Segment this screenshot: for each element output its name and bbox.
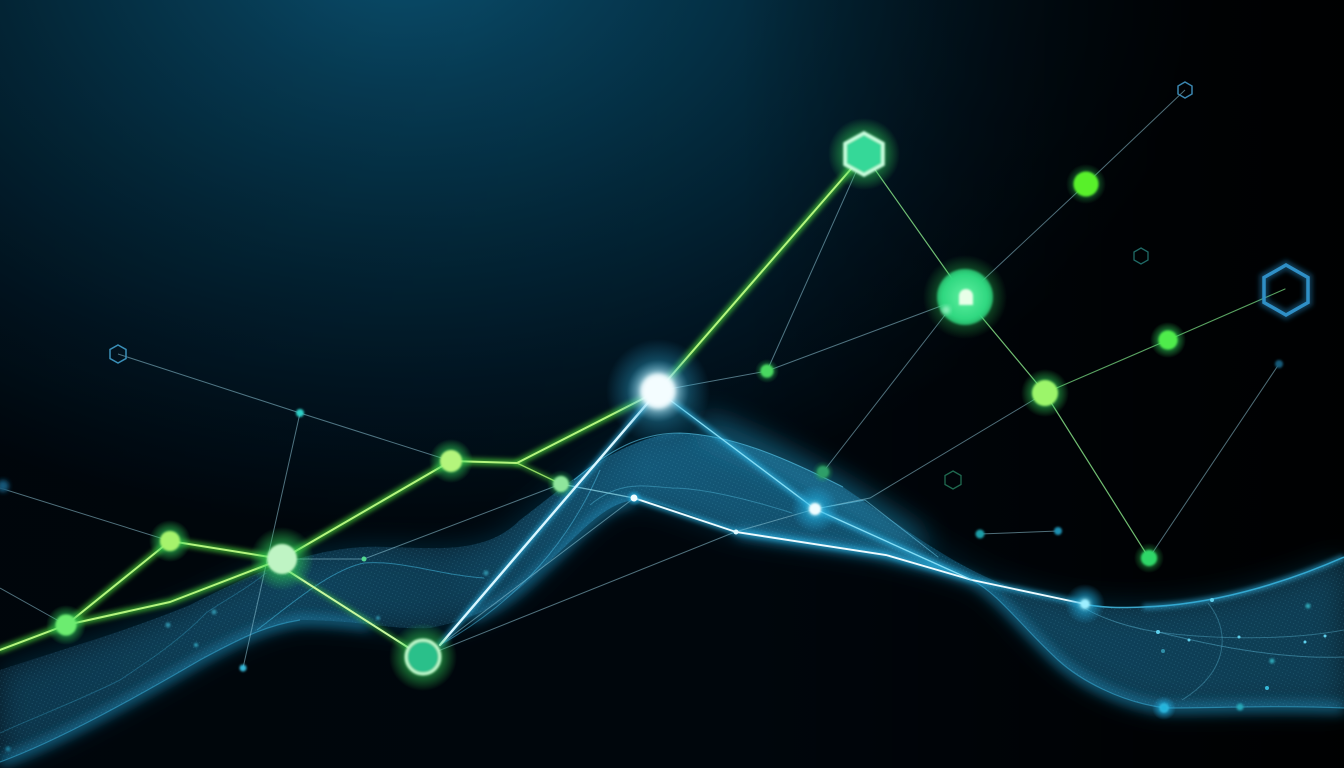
node: left junction bbox=[250, 527, 314, 591]
node: large green lock circle bbox=[923, 255, 1007, 339]
green network lines bbox=[0, 154, 1285, 657]
blue dot nodes bbox=[0, 360, 1326, 752]
node: ring bottom bbox=[389, 623, 457, 691]
green dot nodes bbox=[46, 164, 1186, 645]
node: top hexagon bbox=[828, 118, 900, 190]
hexagon outlines bbox=[110, 82, 1308, 489]
bright white and blue lines bbox=[440, 391, 1085, 645]
blue mesh wave bbox=[0, 425, 1344, 762]
node: large white glow centre bbox=[606, 339, 710, 443]
thin network lines bbox=[0, 90, 1279, 668]
